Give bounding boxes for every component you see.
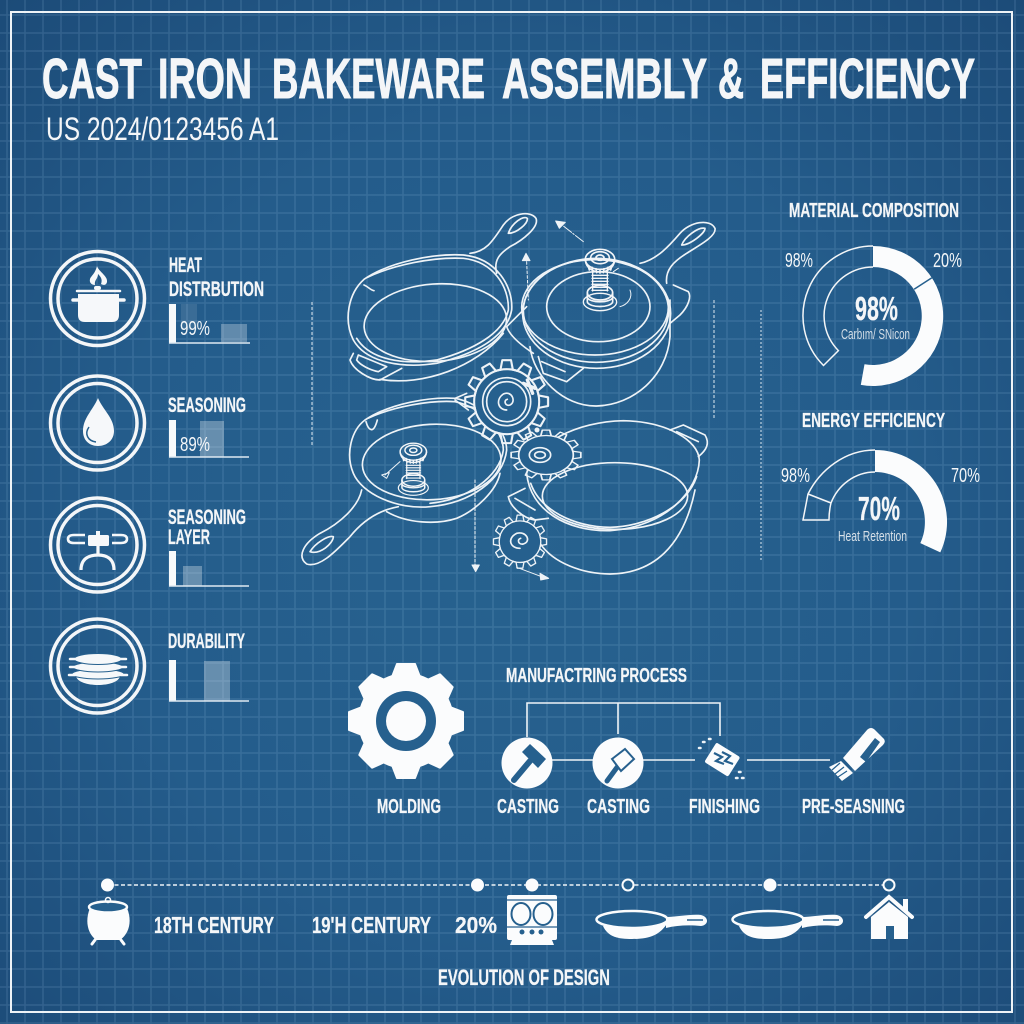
dimension line: right [713,300,715,420]
pan: bottom-right deep pan [508,421,707,574]
icon: house [866,897,912,939]
metric: heat distribution [50,252,264,346]
era label: 19'H CENTURY [312,912,431,938]
value right: 70% [951,465,980,487]
title: & [718,47,744,111]
pan: top-left skillet [348,214,536,381]
timeline track [101,878,894,892]
icon: skillet [732,911,843,939]
icon: seasoning brush [829,728,885,781]
step label: CASTING [587,795,650,818]
pan: top-right lidded pot [507,222,715,406]
step label: MOLDING [377,795,441,818]
title: IRON [158,47,252,111]
panel: evolution of design timeline [87,878,912,990]
value left: 98% [785,250,813,272]
center value: 70% [858,490,900,527]
bar chart [169,551,249,586]
bar chart [169,304,250,343]
panel: energy efficiency [781,409,980,552]
icon: pot with flame [50,252,144,346]
bar chart: 99% [180,318,210,340]
bar chart [169,420,249,457]
metric: durability [50,619,249,713]
bar chart: 89% [180,434,210,456]
icon: finishing tile [699,739,744,778]
process connectors [527,703,830,760]
gear: small lower [493,515,547,568]
title: BAKEWARE [272,47,485,111]
step label: CASTING [497,795,559,818]
title: CAST [42,47,142,111]
panel: property metrics [50,252,264,713]
step label: PRE-SEASNING [802,795,905,818]
step label: FINISHING [689,795,760,818]
label: LAYER [168,526,210,549]
icon: valve and claw [50,498,144,592]
icon: stove [507,895,557,945]
value left: 98% [781,465,810,487]
icon: cauldron [87,898,130,944]
dimension line: far right [760,310,762,560]
icon: hammer [502,738,552,788]
label: DURABILITY [168,630,245,653]
title: ASSEMBLY [502,47,707,111]
panel: exploded pan assembly illustration [302,214,715,580]
bar chart [169,660,249,701]
icon: skillet [596,911,707,939]
metric: seasoning layer [50,498,249,592]
gear: large central [465,360,548,443]
center value: 98% [855,290,898,327]
icon: large molding gear [349,664,463,778]
timeline caption: EVOLUTION OF DESIGN [438,965,610,990]
center caption: Heat Retention [838,529,907,545]
icon: stacked pans [50,619,144,713]
value right: 20% [933,250,962,272]
era label: 18TH CENTURY [154,912,274,938]
pan: bottom-left skillet [302,393,507,565]
icon: oil drop [50,376,144,470]
label: DISTRBUTION [169,278,264,301]
center caption: Carbım/ SNicon [841,326,910,343]
donut gauge [803,246,943,386]
label: SEASONING [168,506,246,529]
label: SEASONING [168,394,246,417]
label: HEAT [169,254,202,277]
title [42,47,975,111]
icon: scraper [592,738,644,788]
heading: MANUFACTRING PROCESS [506,664,687,687]
patent number subtitle: US 2024/0123456 A1 [46,111,279,147]
panel: manufacturing process [377,664,905,818]
metric: seasoning [50,376,249,470]
dimension line: left [311,302,313,447]
panel: material composition [785,199,962,386]
heading: ENERGY EFFICIENCY [802,409,945,432]
gear: small middle [511,430,581,480]
arc gauge [803,450,947,552]
era label: 20% [455,912,497,938]
arrows and dimension lines [472,221,583,580]
